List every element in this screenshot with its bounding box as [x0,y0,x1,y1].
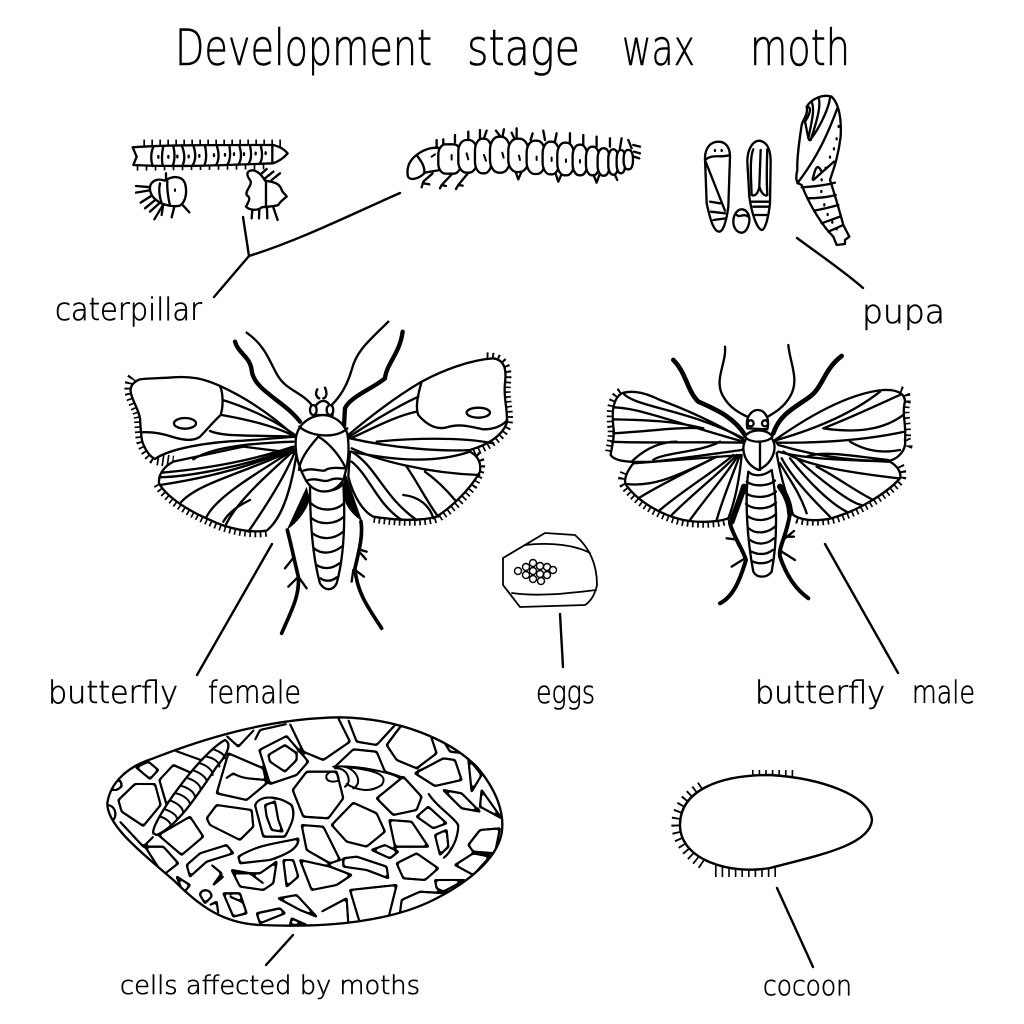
label: butterfly male [755,675,975,711]
antennae [247,322,388,405]
right hindwing [348,448,480,520]
pointer: caterpillar [214,193,400,297]
label: eggs: eggs [536,675,595,711]
forelegs [673,356,842,435]
pointer: eggs [560,614,563,667]
label: butterfly male: butterfly [755,675,885,711]
pointer: cells [266,935,293,965]
thorax [296,415,349,491]
label: cocoon: cocoon [763,969,852,1002]
icon: caterpillar top view [133,145,288,166]
icon: pupa egg [733,209,749,233]
forelegs [235,332,403,427]
left forewing [131,377,295,459]
title: stage [467,19,580,77]
icon: pupa ventral [747,141,771,230]
left hindwing [159,447,297,532]
label: cells affected by moths: cells affected by moths [120,971,420,1001]
icon: pupa lateral [796,96,849,245]
label: pupa: pupa [862,292,945,331]
left forewing [611,392,746,462]
right forewing [775,390,905,461]
abdomen [746,470,776,577]
label: butterfly female: female [208,675,301,711]
pointer: cocoon [777,888,813,967]
title: Development [175,19,432,77]
label: butterfly female [48,675,301,711]
right hindwing [777,452,900,520]
caterpillar drawings [133,128,640,220]
thorax [743,430,775,470]
head [310,401,333,415]
title: moth [750,19,850,77]
pupa drawings [705,96,849,245]
comb cells [108,718,502,925]
moth in comb [326,766,400,790]
legs [720,487,808,603]
moth: male [611,345,907,603]
icon: cocoon [680,775,872,870]
legs [282,472,382,633]
label: caterpillar: caterpillar [55,292,202,328]
pointer: butterfly female [197,544,272,675]
pointer: butterfly male [825,544,898,673]
left hindwing [625,455,742,522]
icon: eggs on comb [503,533,597,607]
pointer: pupa [797,238,863,288]
moth: female [130,322,507,633]
head [747,410,768,429]
right forewing [348,358,507,450]
icon: pupa side [705,142,730,232]
label: butterfly male: male [912,675,975,711]
antennae [720,345,794,417]
icon: caterpillar head front [136,173,189,219]
icon: caterpillar side view [407,128,640,189]
wing hair [130,378,173,462]
title: wax [622,19,695,77]
abdomen [310,483,344,589]
larva in comb [153,740,228,835]
icon: caterpillar head side [246,169,287,220]
comb outline [107,717,502,926]
comb: cells affected by moths [107,717,502,926]
wing hair [611,393,622,455]
label: butterfly female: butterfly [48,675,178,711]
comb background [107,717,502,926]
title [175,19,850,77]
